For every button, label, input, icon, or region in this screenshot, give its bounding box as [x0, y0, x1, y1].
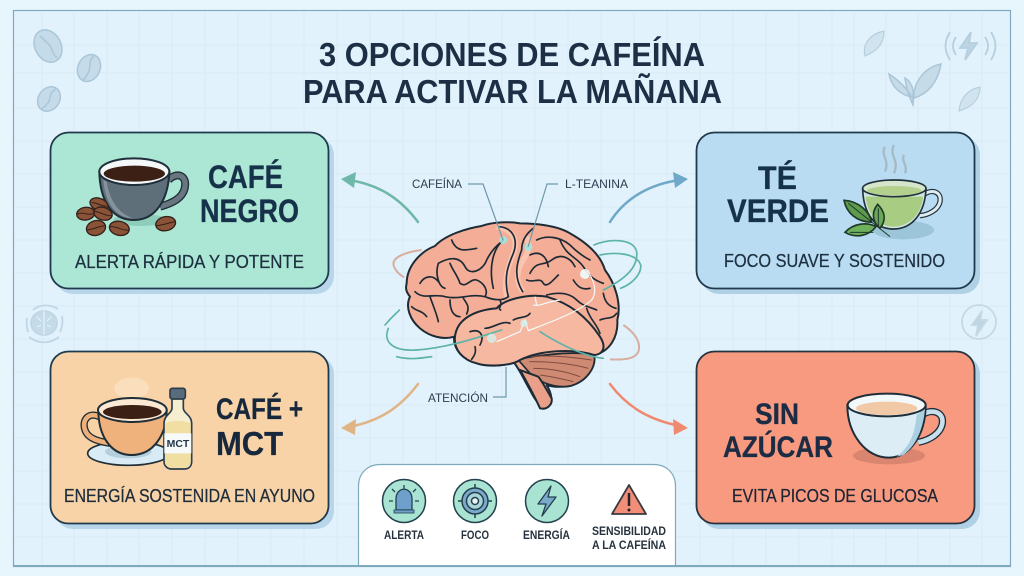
arrow: to té verde — [610, 172, 688, 222]
label: sensibilidad a la cafeína: SENSIBILIDAD — [592, 524, 666, 538]
label: sensibilidad a la cafeína — [592, 524, 666, 552]
arrow: to café + MCT — [341, 384, 418, 435]
label: cafeína: CAFEÍNA — [412, 176, 462, 191]
heading: té verde: TÉ — [758, 160, 797, 196]
title — [303, 36, 722, 110]
heading: sin azúcar: SIN — [755, 398, 799, 431]
heading: café + MCT — [216, 392, 303, 462]
brain illustration — [385, 222, 641, 409]
heading: té verde: VERDE — [727, 193, 829, 229]
icon: warning triangle — [612, 485, 646, 514]
heading: sin azúcar — [723, 398, 833, 464]
label: foco: FOCO — [461, 528, 489, 542]
heading: café negro: NEGRO — [200, 193, 299, 229]
subtitle: té verde: FOCO SUAVE Y SOSTENIDO — [724, 251, 945, 271]
arrow: to sin azúcar — [610, 384, 688, 435]
neural glow — [385, 236, 641, 359]
decorative brain icon — [27, 305, 62, 342]
icon: foco — [454, 480, 496, 522]
heading: té verde — [727, 160, 829, 229]
panel: café + MCT — [50, 352, 334, 529]
label: atención: ATENCIÓN — [428, 390, 488, 405]
label: l-teanina: L-TEANINA — [565, 177, 628, 191]
heading: café negro: CAFÉ — [208, 159, 283, 195]
panel: sin azúcar — [696, 352, 980, 529]
legend panel — [14, 464, 1010, 566]
title: PARA ACTIVAR LA MAÑANA — [303, 73, 722, 110]
label: cafeína — [412, 176, 503, 240]
label: energía: ENERGÍA — [523, 527, 570, 542]
panel: té verde — [696, 132, 980, 294]
heading: café + MCT: MCT — [216, 425, 283, 462]
label: atención — [428, 367, 506, 405]
decorative tea leaves — [864, 31, 980, 111]
heading: café + MCT: CAFÉ + — [216, 392, 303, 426]
icon: white cup — [847, 394, 942, 464]
label: l-teanina — [528, 177, 628, 247]
title: 3 OPCIONES DE CAFEÍNA — [319, 36, 705, 73]
subtitle: café negro: ALERTA RÁPIDA Y POTENTE — [75, 252, 304, 272]
decorative lightning icon — [962, 305, 996, 339]
decorative coffee beans — [29, 25, 105, 116]
subtitle: sin azúcar: EVITA PICOS DE GLUCOSA — [732, 486, 938, 506]
icon: black coffee with beans — [76, 158, 185, 238]
icon: energía — [526, 480, 568, 522]
label: sensibilidad a la cafeína: A LA CAFEÍNA — [592, 537, 666, 552]
panel: café negro — [50, 132, 334, 294]
icon: coffee with MCT bottle: MCT — [167, 439, 189, 450]
subtitle: café + MCT: ENERGÍA SOSTENIDA EN AYUNO — [64, 486, 315, 506]
heading: café negro — [200, 159, 299, 229]
heading: sin azúcar: AZÚCAR — [723, 430, 833, 464]
icon: coffee with MCT bottle — [84, 378, 192, 469]
label: alerta: ALERTA — [384, 528, 424, 542]
icon: alerta — [382, 480, 426, 522]
decorative energy signal icon — [946, 32, 996, 60]
arrow: to café negro — [341, 172, 418, 222]
icon: green tea cup with leaves — [844, 145, 940, 239]
